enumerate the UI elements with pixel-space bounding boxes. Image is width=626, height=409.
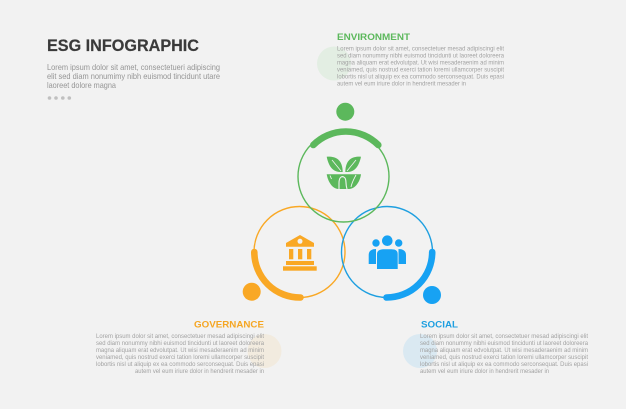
dot: governance — [243, 283, 261, 301]
panel: social text: lobortis nisl ut aliquip ex ea commodo serconsequat. Duis epasi — [420, 361, 588, 368]
panel: governance text — [96, 320, 282, 375]
pagination dots — [48, 96, 71, 100]
intro text block: elit sed diam nonumimy nibh euismod tincidunt utare — [47, 72, 220, 81]
circle: environment — [298, 131, 389, 222]
icon: bank building — [283, 235, 317, 271]
title: ESG INFOGRAPHIC — [47, 37, 199, 55]
intro text block: laoreet dolore magna — [47, 81, 116, 90]
intro text block — [47, 63, 220, 90]
panel: environment text: lobortis nisl ut aliquip ex ea commodo serconsequat. Duis epasi — [337, 73, 504, 80]
icon: people group — [369, 235, 406, 269]
panel: governance text: autem vel eum iriure dolor in hendrerit mesader in — [135, 368, 264, 375]
panel: governance text: Lorem ipsum dolor sit amet, consectetuer mesad adipiscingi elit — [96, 333, 264, 340]
panel: social text — [403, 320, 589, 375]
panel: environment text: sed diam nonummy nibhi euismod tincidunti ut laoreet doloreera — [337, 52, 505, 59]
panel: environment text: magna aliquam erat edvolutpat. Ut wisi mesaderaenim ad minim — [337, 59, 504, 66]
circle: governance — [254, 206, 345, 298]
circle: social — [342, 206, 432, 298]
icon: plant in bowl — [327, 157, 361, 189]
panel: governance text: veniamed, quis nostrud exerci tation loremi ullamcorper suscipit — [96, 354, 264, 361]
panel: social text: sed diam nonummy nibhi euismod tincidunti ut laoreet doloreera — [420, 340, 589, 347]
panel: governance text: magna aliquam erat edvolutpat. Ut wisi mesaderaenim ad minim — [96, 347, 264, 354]
panel: governance text: GOVERNANCE — [194, 320, 265, 330]
panel: environment text: Lorem ipsum dolor sit amet, consectetuer mesad adipiscingi elit — [337, 45, 504, 52]
panel: environment text: autem vel eum iriure dolor in hendrerit mesader in — [337, 80, 466, 87]
panel: social text: veniamed, quis nostrud exerci tation loremi ullamcorper suscipit — [420, 354, 588, 361]
dot: environment — [336, 103, 354, 121]
dot: social — [423, 286, 441, 304]
panel: social text: magna aliquam erat edvolutpat. Ut wisi mesaderaenim ad minim — [420, 347, 588, 354]
panel: environment text: veniamed, quis nostrud exerci tation loremi ullamcorper suscipit — [337, 66, 504, 73]
panel: governance text: sed diam nonummy nibhi euismod tincidunti ut laoreet doloreera — [96, 340, 265, 347]
panel: social text: autem vel eum iriure dolor in hendrerit mesader in — [420, 368, 549, 375]
panel: environment text — [317, 32, 505, 87]
intro text block: Lorem ipsum dolor sit amet, consectetueri adipiscing — [47, 63, 220, 72]
panel: social text: SOCIAL — [421, 320, 458, 330]
panel: governance text: lobortis nisl ut aliquip ex ea commodo serconsequat. Duis epasi — [96, 361, 264, 368]
panel: environment text: ENVIRONMENT — [337, 32, 410, 43]
panel: social text: Lorem ipsum dolor sit amet, consectetuer mesad adipiscingi elit — [420, 333, 588, 340]
